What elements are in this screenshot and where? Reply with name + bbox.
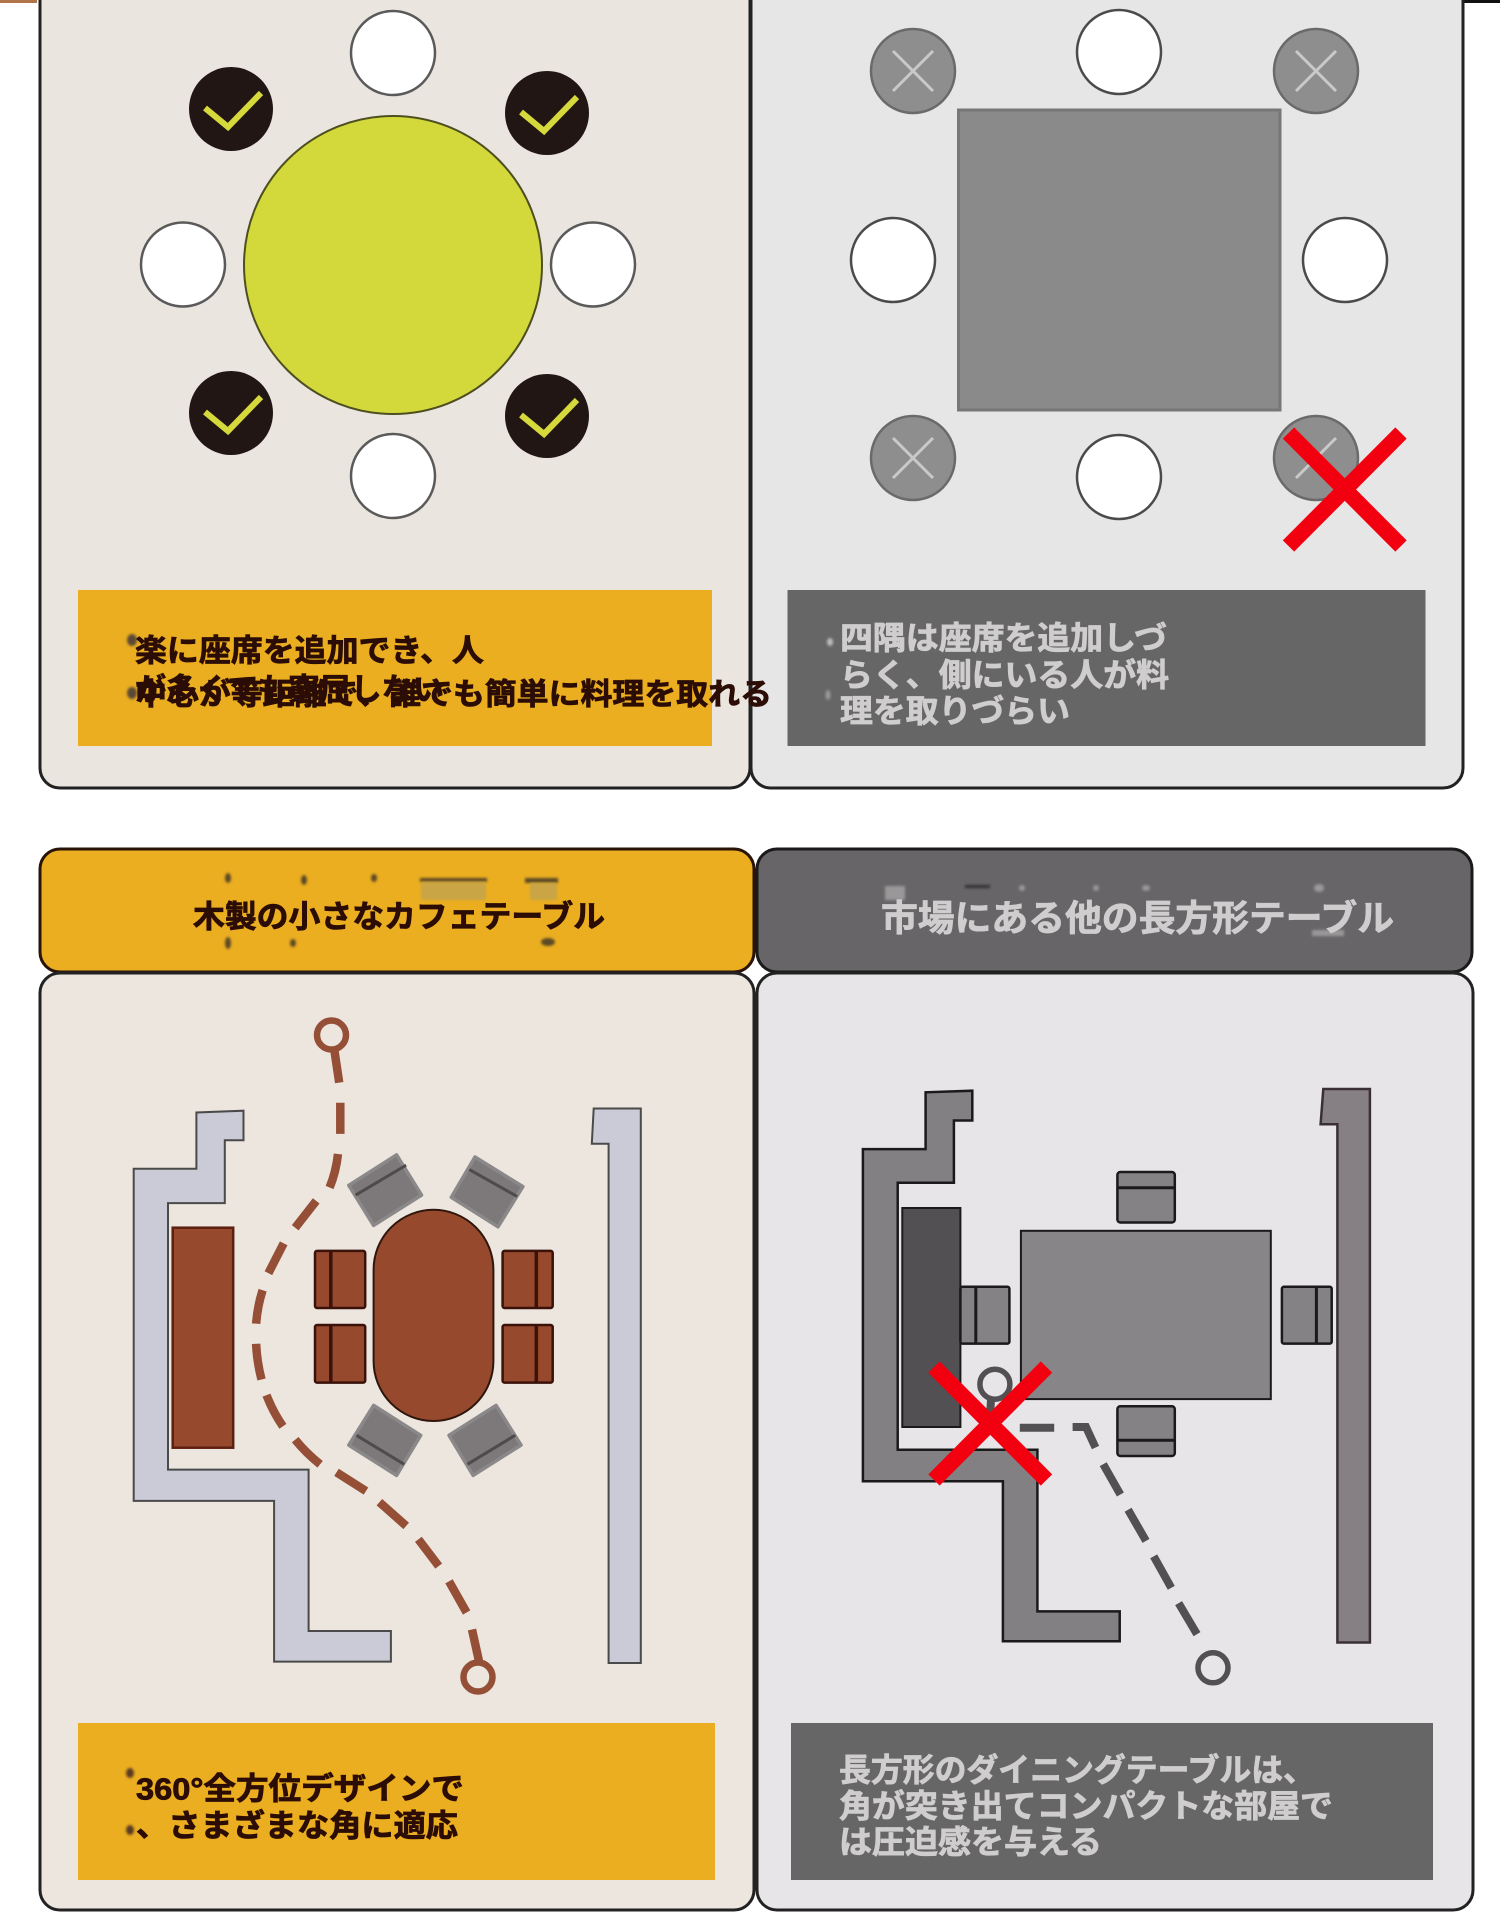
callout: rectangular table drawback: 理を取りづらい bbox=[840, 693, 1070, 729]
heading: wooden cafe table: 木製の小さなカフェテーブル bbox=[193, 900, 605, 934]
callout: round table benefit: が多くても窮屈しない bbox=[135, 672, 444, 708]
white seats bbox=[851, 10, 1387, 519]
callout: rectangular table drawback: らく、側にいる人が料 bbox=[840, 657, 1169, 693]
callout: rectangular table drawback bbox=[788, 590, 1426, 746]
blocked corner seats bbox=[871, 29, 1358, 500]
white seats bbox=[141, 11, 635, 518]
dashed walking route bbox=[256, 1020, 492, 1692]
callout: round table benefit: 楽に座席を追加でき、人 bbox=[135, 634, 484, 668]
sideboard bbox=[173, 1228, 233, 1448]
icon: red cross bbox=[1288, 433, 1401, 546]
grey angled chairs bbox=[349, 1155, 523, 1475]
icon: red cross bbox=[934, 1367, 1046, 1480]
room walls bbox=[863, 1089, 1370, 1642]
rectangular dining table bbox=[1021, 1231, 1271, 1399]
room walls bbox=[134, 1108, 641, 1663]
sideboard bbox=[902, 1208, 960, 1427]
panel: rectangular table seating bbox=[751, 0, 1463, 788]
checked seats bbox=[189, 67, 589, 458]
callout: all-direction design bbox=[78, 1723, 715, 1880]
heading: wooden cafe table bbox=[40, 849, 754, 972]
callout: all-direction design: 、さまざまな角に適応 bbox=[136, 1808, 458, 1844]
round table bbox=[244, 116, 542, 414]
panel: rectangular table floor plan bbox=[757, 973, 1473, 1910]
callout: round table benefit: 中心が等距離で、誰でも簡単に料理を取れる bbox=[135, 678, 772, 712]
callout: corners feel oppressive: 角が突き出てコンパクトな部屋で bbox=[839, 1788, 1333, 1824]
chairs bbox=[960, 1172, 1332, 1456]
callout: all-direction design: 360°全方位デザインで bbox=[136, 1772, 464, 1806]
callout: corners feel oppressive bbox=[791, 1723, 1433, 1880]
callout: rectangular table drawback: 四隅は座席を追加しづ bbox=[840, 620, 1167, 656]
heading: other rectangular tables bbox=[757, 849, 1472, 972]
panel: round table seating bbox=[40, 0, 772, 788]
brown chairs bbox=[315, 1251, 553, 1383]
oval dining table bbox=[374, 1210, 493, 1421]
callout: round table benefit bbox=[78, 590, 772, 746]
dashed blocked route bbox=[980, 1369, 1228, 1683]
callout: corners feel oppressive: 長方形のダイニングテーブルは、 bbox=[839, 1752, 1315, 1788]
panel: wooden table floor plan bbox=[40, 973, 754, 1910]
square table bbox=[958, 110, 1280, 410]
callout: corners feel oppressive: は圧迫感を与える bbox=[839, 1824, 1102, 1860]
heading: other rectangular tables: 市場にある他の長方形テーブル bbox=[881, 898, 1394, 938]
